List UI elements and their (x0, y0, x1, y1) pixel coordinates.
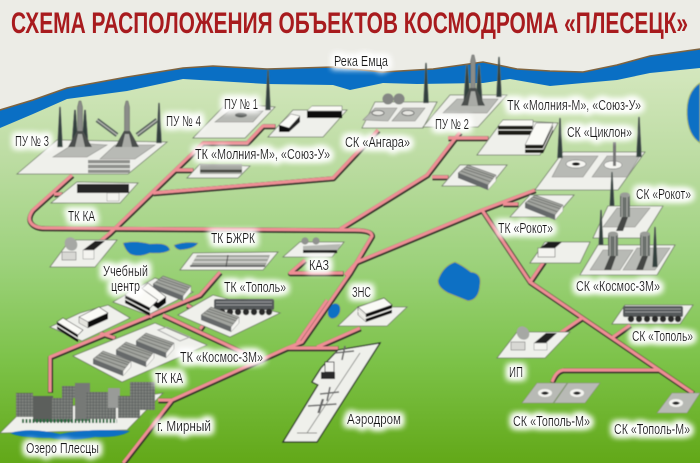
BZhRK building (180, 252, 278, 270)
label: training centre: Учебный (103, 264, 148, 280)
lakes: near training centre (123, 242, 198, 256)
label: TK Kosmos: ТК «Космос-3М» (180, 350, 263, 366)
KAZ plant (283, 237, 344, 257)
label: river: Река Емца (334, 54, 389, 70)
label: PU 1: ПУ № 1 (224, 97, 258, 113)
Topol assembly (178, 295, 280, 337)
ZNS building (338, 298, 407, 326)
label: Molniya left: ТК «Молния-М», «Союз-У» (195, 147, 330, 163)
dish station (50, 235, 117, 267)
label: KAZ: КАЗ (309, 258, 329, 274)
lake: right edge (687, 83, 700, 143)
label: training centre: центр (111, 279, 140, 295)
label: PU 3: ПУ № 3 (15, 134, 49, 150)
hangar under Molniya (442, 165, 507, 190)
airfield (283, 343, 380, 442)
label: Topol-M 1: СК «Тополь-М» (513, 414, 590, 430)
pad 1 (193, 70, 275, 138)
Rokot assembly (510, 195, 574, 220)
label: airfield: Аэродром (347, 412, 401, 428)
label: TK KA lower: ТК КА (155, 371, 183, 387)
Molniya assembly right (477, 120, 558, 155)
label: TK KA upper: ТК КА (68, 209, 95, 225)
label: lake: Озеро Плесцы (26, 441, 99, 457)
label: Tsiklon: СК «Циклон» (567, 125, 632, 141)
label: Molniya right: ТК «Молния-М», «Союз-У» (507, 98, 641, 114)
Topol launch site (612, 305, 693, 324)
label: ZNS: ЗНС (352, 285, 371, 301)
label: IP: ИП (509, 365, 523, 381)
Molniya assembly left (187, 164, 250, 178)
Rokot launch complex (593, 192, 663, 250)
Training centre buildings (50, 276, 193, 342)
pad 2 (423, 55, 507, 127)
label: PU 2: ПУ № 2 (435, 117, 469, 133)
lake: small (325, 301, 343, 321)
label: TK BZhRK: ТК БЖРК (211, 231, 255, 247)
label: Mirny: г. Мирный (157, 419, 211, 435)
road network (29, 126, 693, 463)
Kosmos-3M assembly (73, 323, 207, 382)
Mirny city complex (0, 382, 163, 440)
Kosmos-3M launch complex (530, 227, 675, 275)
assembly building near pad 1 (268, 106, 347, 137)
label: SK Kosmos: СК «Космос-3М» (576, 279, 660, 295)
tracking station (497, 324, 570, 358)
label: PU 4: ПУ № 4 (166, 114, 201, 130)
label: TK Rokot: ТК «Рокот» (498, 221, 553, 237)
lake: centre (438, 262, 480, 301)
Tsiklon launch complex (535, 117, 645, 212)
Angara launch complex (362, 63, 437, 128)
launch pads 3 and 4 (17, 101, 167, 174)
label: Angara: СК «Ангара» (345, 135, 410, 151)
river (0, 49, 700, 128)
Topol-M silos (522, 383, 700, 413)
label: training centre (103, 264, 148, 295)
label: TK Topol: ТК «Тополь» (224, 280, 286, 296)
spacecraft assembly building (51, 182, 138, 203)
